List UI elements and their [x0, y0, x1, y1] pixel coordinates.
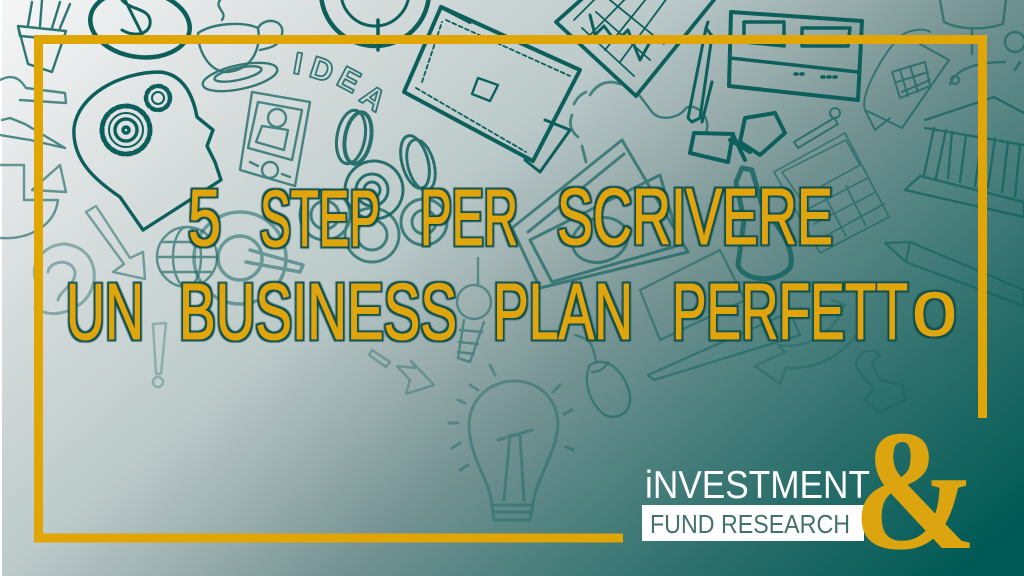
title line 2: BUSINESS	[179, 267, 457, 356]
icon: telephone	[864, 30, 949, 130]
icon: curved arrow	[755, 300, 860, 384]
icon: handshake cuffs	[640, 96, 785, 162]
icon: pound sign	[856, 351, 905, 412]
icon: office chair	[940, 0, 1024, 84]
title line 1: 5	[188, 173, 221, 262]
icon: calculator	[774, 133, 889, 253]
icon: head with gears	[74, 72, 221, 230]
icon: briefcase	[404, 7, 580, 172]
icon: light bulb	[449, 365, 573, 520]
title line 1: PER	[420, 173, 518, 262]
logo: investment: iNVESTMENT	[645, 464, 870, 507]
icon: coins	[333, 108, 440, 219]
icon: pie chart	[0, 165, 66, 238]
title line 2: o	[912, 263, 957, 352]
icon: idea letters	[291, 45, 392, 119]
icon: stylus	[794, 108, 840, 148]
icon: coffee cup	[198, 0, 282, 97]
icon: target	[321, 0, 429, 50]
title line 2	[66, 263, 957, 356]
icon: tablet profile	[240, 92, 310, 186]
title line 1	[188, 172, 833, 263]
logo: white band	[642, 505, 864, 541]
frame: gold border open at bottom right	[38, 40, 982, 538]
icon: laptop	[640, 250, 800, 380]
icon: idea letters: A	[354, 77, 392, 119]
icon: keys	[0, 77, 66, 148]
icon: banking screen	[729, 12, 862, 100]
logo	[642, 396, 977, 576]
icon: pencil	[885, 242, 1024, 306]
icon: question mark	[34, 244, 94, 314]
icon: idea letters: I	[291, 45, 305, 81]
icon: lower coins	[300, 190, 447, 262]
title line 1: STEP	[260, 174, 380, 263]
icon: tie	[736, 168, 791, 279]
icon: banknotes	[512, 140, 688, 288]
icon: idea letters: E	[332, 59, 366, 100]
title	[66, 172, 957, 356]
icon: bank building	[905, 97, 1024, 217]
icon: arrow down	[86, 206, 145, 279]
icon: dashed arrow	[369, 350, 434, 394]
logo: fund research: FUND RESEARCH	[650, 509, 850, 539]
icon: chart tablet	[556, 0, 722, 96]
title line 1: SCRIVERE	[557, 172, 833, 261]
icon: wristwatch	[457, 258, 491, 362]
icon: dashed arc	[570, 82, 620, 162]
icon: computer mouse	[575, 335, 630, 417]
icon: pen	[688, 22, 712, 122]
icon: globe	[157, 227, 217, 287]
title line 2: PLAN	[493, 267, 633, 356]
icon: idea letters: D	[306, 49, 338, 90]
icon: exclamation mark	[153, 323, 166, 387]
title line 2: UN	[66, 267, 144, 356]
icon: dollar coin	[86, 0, 194, 64]
icon: target with arrow	[194, 212, 303, 304]
icon: pencil cup	[18, 0, 70, 72]
